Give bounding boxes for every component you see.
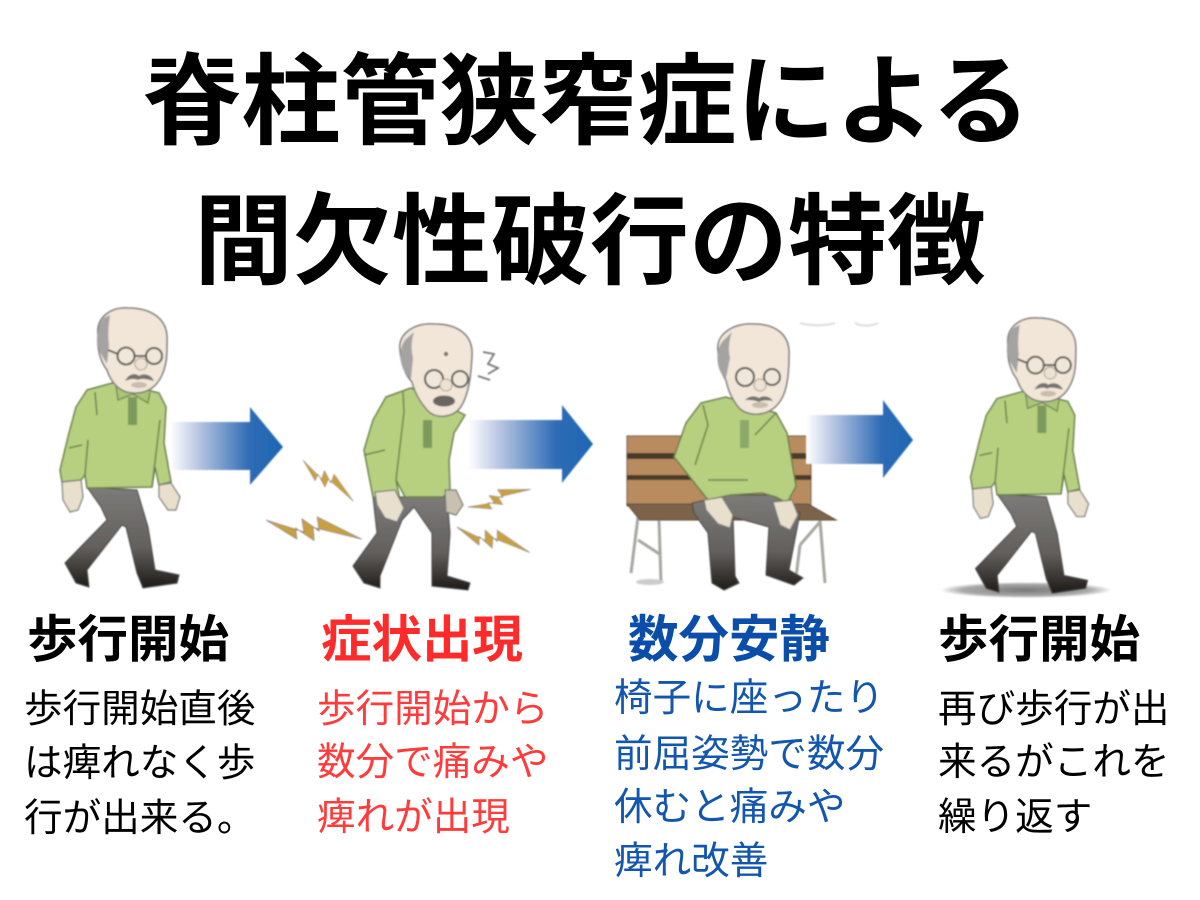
icon: stress mark	[478, 352, 498, 380]
text block 4: 来るがこれを	[938, 741, 1169, 784]
text block 1	[24, 688, 255, 840]
text block 4: 再び歩行が出	[938, 688, 1169, 731]
text block 3: 痺れ改善	[614, 840, 768, 883]
heading: walking start: 歩行開始	[27, 611, 229, 668]
text block 3	[614, 677, 884, 883]
heading: walking start again: 歩行開始	[938, 611, 1140, 668]
text block 2: 歩行開始から	[317, 688, 548, 731]
arrow 1	[170, 407, 283, 485]
arrow 3	[806, 400, 913, 478]
text block 3: 休むと痛みや	[614, 786, 845, 829]
bench	[627, 436, 836, 585]
figure: man with symptoms	[265, 324, 533, 590]
text block 1: 行が出来る。	[24, 797, 255, 840]
text block 1: 歩行開始直後	[24, 688, 255, 731]
figure: man walking (start)	[60, 308, 180, 588]
text block 3: 椅子に座ったり	[614, 677, 884, 720]
heading: several minutes rest: 数分安静	[628, 611, 830, 668]
text block 4: 繰り返す	[938, 796, 1092, 839]
top smudge	[800, 323, 878, 326]
figure: man walking again with shadow	[940, 318, 1112, 598]
text block 1: は痺れなく歩	[24, 742, 255, 785]
icon: pain bolts	[265, 456, 533, 557]
text block 2: 痺れが出現	[317, 796, 510, 839]
title	[142, 46, 1031, 297]
text block 4	[938, 688, 1169, 839]
text block 2	[317, 688, 548, 839]
arrow 2	[468, 405, 593, 483]
heading: symptoms appear: 症状出現	[321, 611, 523, 668]
figure: man resting on bench	[627, 323, 878, 590]
text block 3: 前屈姿勢で数分	[614, 733, 884, 776]
text block 2: 数分で痛みや	[317, 741, 548, 784]
title: 間欠性破行の特徴	[194, 186, 986, 297]
title: 脊柱管狭窄症による	[142, 46, 1031, 157]
